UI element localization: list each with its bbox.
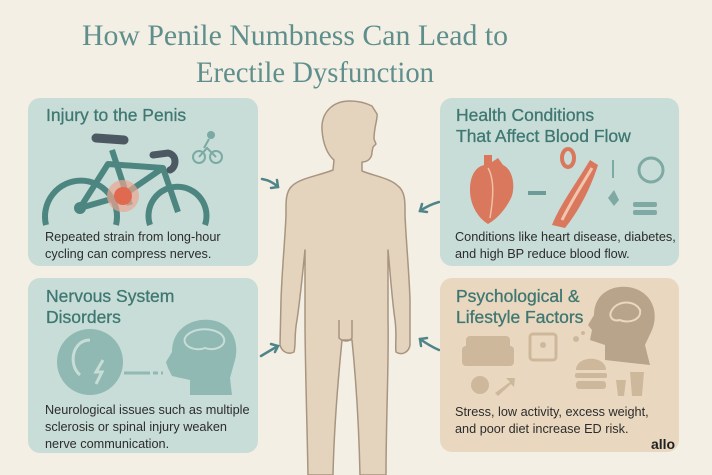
text: psych body: and poor diet increase ED risk. [455, 422, 628, 436]
title: Erectile Dysfunction [196, 56, 434, 89]
panel: nervous system disorders [28, 278, 258, 453]
icon: head with brain [166, 320, 236, 395]
icon: couch [462, 336, 514, 366]
text: nervous body: sclerosis or spinal injury weaken [45, 420, 227, 434]
icon: small cyclist [193, 132, 222, 163]
panel: health conditions [440, 98, 679, 266]
icon: artery [552, 149, 598, 228]
icon: bicycle [45, 138, 206, 225]
icon: dots [573, 331, 585, 342]
icon: burger and drink [575, 359, 644, 396]
text: injury body: cycling can compress nerves. [45, 247, 211, 261]
arrow: psych to body [420, 338, 439, 350]
arrow: nervous to body [261, 344, 278, 356]
body silhouette [280, 101, 410, 475]
arrow: health to body [420, 202, 439, 212]
icon: head with brain [588, 287, 655, 365]
text: nervous body: nerve communication. [45, 437, 169, 451]
title: How Penile Numbness Can Lead to [82, 19, 508, 52]
heading: health: Health Conditions [456, 105, 594, 125]
arrow: injury to body [262, 179, 278, 188]
icon: scale [530, 334, 556, 360]
heading: nervous: Disorders [46, 307, 121, 327]
icon: clock and arrow [471, 376, 515, 396]
icon: dash [528, 191, 546, 195]
text: psych body: Stress, low activity, excess weight, [455, 405, 649, 419]
text: injury body: Repeated strain from long-hour [45, 230, 221, 244]
text: health body: Conditions like heart disease, diabetes, [455, 230, 676, 244]
heading: psych: Lifestyle Factors [456, 307, 584, 327]
panel: injury to the penis [28, 98, 258, 266]
text: health body: and high BP reduce blood flow. [455, 247, 630, 261]
text: nervous body: Neurological issues such as multiple [45, 403, 250, 417]
panel: psychological & lifestyle [440, 278, 679, 452]
heading: psych: Psychological & [456, 286, 580, 306]
icon: heart [470, 155, 513, 224]
icon: blood sugar and food [608, 158, 663, 215]
icon: dashed connector [124, 372, 163, 374]
heading: injury: Injury to the Penis [46, 105, 186, 125]
heading: health: That Affect Blood Flow [456, 126, 631, 146]
title [82, 19, 508, 89]
logo: allo: allo [651, 436, 675, 452]
icon: nerve circle [57, 329, 123, 395]
heading: nervous: Nervous System [46, 286, 174, 306]
